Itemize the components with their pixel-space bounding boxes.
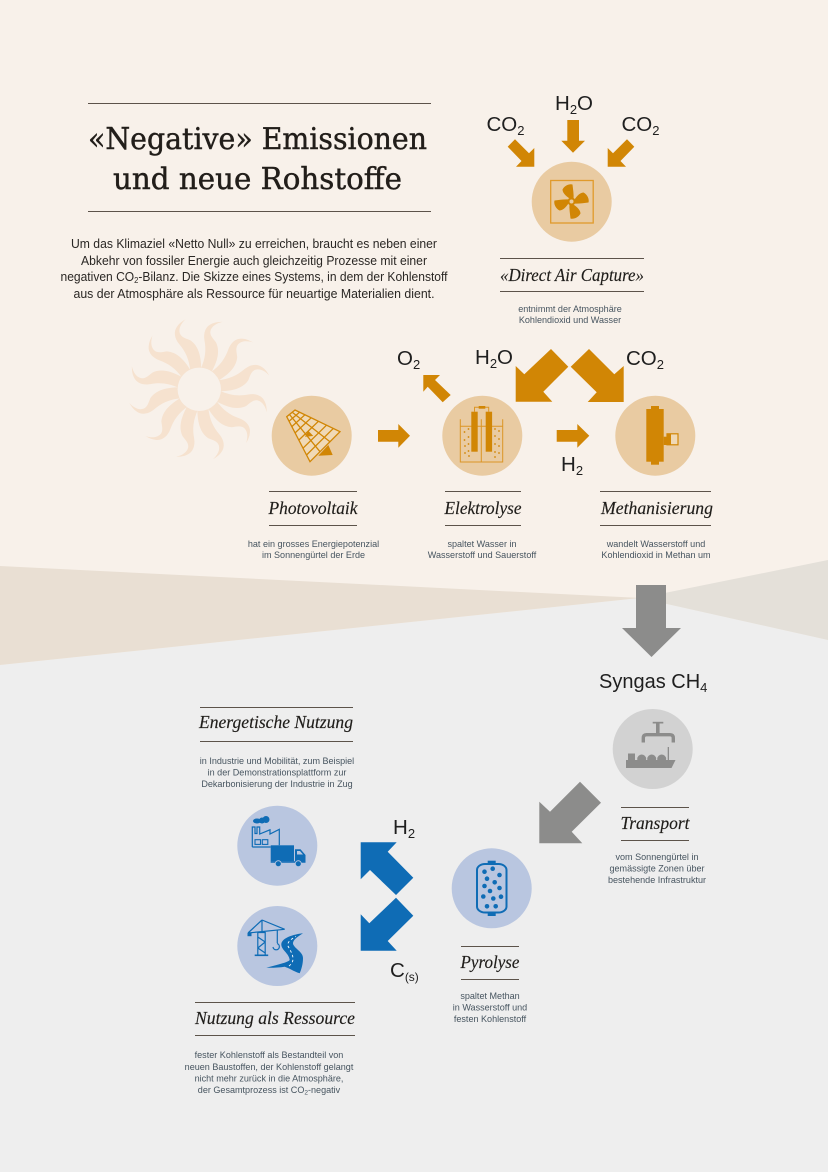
caption: Elektrolyse: Wasserstoff und Sauerstoff — [428, 550, 537, 560]
label: Syngas CH4: 4 — [700, 680, 707, 695]
heading: Photovoltaik: Photovoltaik — [268, 498, 358, 518]
arrow: grey big down — [622, 585, 681, 657]
labels: H2 and solid carbon: (s) — [405, 970, 419, 984]
intro text: aus der Atmosphäre als Ressource für neuartige Materialien dient. — [74, 287, 434, 301]
intro text: Um das Klimaziel «Netto Null» zu erreichen, braucht es neben einer — [71, 237, 437, 251]
caption: Energetische Nutzung — [200, 756, 354, 789]
labels: direct air capture inputs — [486, 92, 659, 138]
caption: Elektrolyse — [428, 539, 537, 560]
heading: Elektrolyse — [444, 492, 522, 526]
arrow: grey diagonal to pyrolyse — [539, 782, 601, 843]
caption: Pyrolyse: spaltet Methan — [460, 991, 520, 1001]
caption: Transport: gemässigte Zonen über — [609, 864, 705, 874]
labels: electrolysis outputs and inputs: O — [497, 346, 513, 369]
icon: direct air capture fan — [532, 162, 612, 242]
icon: pyrolyse — [452, 848, 532, 928]
caption: Transport: vom Sonnengürtel in — [616, 852, 698, 862]
labels: H2 and solid carbon: C — [390, 959, 405, 982]
caption: Energetische Nutzung: in Industrie und Mobilität, zum Beispiel — [200, 756, 354, 766]
icon: sun — [126, 316, 272, 462]
title block — [88, 104, 431, 212]
labels: H2 and solid carbon: H — [393, 816, 408, 839]
title block: «Negative» Emissionen — [88, 122, 427, 157]
intro text: negativen CO — [60, 270, 138, 284]
heading: Nutzung als Ressource: Nutzung als Ressource — [194, 1008, 355, 1028]
caption: Photovoltaik: im Sonnengürtel der Erde — [262, 550, 365, 560]
caption: Pyrolyse: in Wasserstoff und — [453, 1002, 527, 1012]
caption: Nutzung als Ressource: fester Kohlenstoff als Bestandteil von — [195, 1050, 343, 1060]
caption: Pyrolyse — [453, 991, 527, 1024]
heading: Methanisierung — [600, 492, 713, 526]
caption: Nutzung als Ressource — [185, 1050, 354, 1096]
heading: Methanisierung: Methanisierung — [600, 498, 713, 518]
caption: Nutzung als Ressource: 2 — [304, 1090, 308, 1096]
labels: electrolysis outputs and inputs: 2 — [413, 357, 420, 372]
caption: Transport: bestehende Infrastruktur — [608, 875, 706, 885]
background: grey lower area — [0, 598, 828, 1172]
arrow: CO2 big — [571, 349, 624, 402]
arrow: H2O down to fan — [561, 120, 585, 153]
arrow: CO2 right to fan — [608, 139, 634, 167]
labels: direct air capture inputs: O — [577, 92, 593, 115]
caption: Nutzung als Ressource: nicht mehr zurück in die Atmosphäre, — [195, 1074, 343, 1084]
heading: Pyrolyse — [460, 946, 520, 980]
labels: direct air capture inputs: 2 — [517, 123, 524, 138]
title block: und neue Rohstoffe — [113, 162, 402, 197]
icon: methanisierung — [615, 396, 695, 476]
caption: Direct Air Capture: entnimmt der Atmosphäre — [518, 304, 622, 314]
caption: Nutzung als Ressource: neuen Baustoffen, der Kohlenstoff gelangt — [185, 1062, 354, 1072]
labels: electrolysis outputs and inputs — [397, 346, 664, 478]
caption: Photovoltaik — [248, 539, 379, 560]
caption: Direct Air Capture: Kohlendioxid und Wasser — [519, 315, 621, 325]
heading: Photovoltaik — [268, 492, 358, 526]
caption: Pyrolyse: festen Kohlenstoff — [454, 1014, 527, 1024]
icon: elektrolyse — [442, 396, 522, 476]
caption: Methanisierung: wandelt Wasserstoff und — [606, 539, 705, 549]
label: Syngas CH4: Syngas CH — [599, 671, 700, 693]
intro text: 2 — [134, 276, 139, 285]
background: right grey band — [640, 560, 828, 640]
labels: direct air capture inputs: CO — [622, 113, 652, 136]
labels: electrolysis outputs and inputs: H — [475, 346, 490, 369]
labels: direct air capture inputs: H — [555, 92, 570, 115]
icon: transport — [613, 709, 693, 789]
heading: Transport — [620, 808, 690, 840]
heading: Elektrolyse: Elektrolyse — [444, 498, 522, 518]
arrow: CO2 left to fan — [508, 139, 534, 167]
icon: factory and truck — [237, 806, 317, 886]
arrow: O2 out — [423, 375, 451, 402]
caption: Transport — [608, 852, 706, 885]
caption: Energetische Nutzung: Dekarbonisierung der Industrie in Zug — [201, 779, 353, 789]
arrow: H2 to methanisierung — [557, 424, 589, 448]
labels: electrolysis outputs and inputs: CO — [626, 347, 657, 370]
caption: Nutzung als Ressource: -negativ — [308, 1085, 341, 1095]
caption: Methanisierung — [601, 539, 711, 560]
labels: electrolysis outputs and inputs: O — [397, 347, 413, 370]
background: left beige band — [0, 566, 640, 665]
intro text — [60, 237, 448, 301]
icon: photovoltaik — [272, 396, 352, 476]
labels: electrolysis outputs and inputs: 2 — [490, 356, 497, 371]
caption: Nutzung als Ressource: der Gesamtprozess ist CO — [198, 1085, 304, 1095]
intro text: -Bilanz. Die Skizze eines Systems, in dem der Kohlenstoff — [138, 270, 448, 284]
heading: Transport: Transport — [620, 813, 690, 833]
labels: direct air capture inputs: 2 — [570, 102, 577, 117]
arrow: blue up-left H2 — [361, 842, 413, 895]
labels: electrolysis outputs and inputs: 2 — [576, 463, 583, 478]
intro text: Abkehr von fossiler Energie auch gleichzeitig Prozesse mit einer — [81, 254, 427, 268]
arrow: photovoltaik to elektrolyse — [378, 424, 410, 448]
caption: Direct Air Capture — [518, 304, 622, 325]
icon: crane and road — [237, 906, 317, 986]
labels: electrolysis outputs and inputs: H — [561, 453, 576, 476]
labels: H2 and solid carbon — [390, 816, 419, 984]
caption: Methanisierung: Kohlendioxid in Methan um — [601, 550, 711, 560]
labels: electrolysis outputs and inputs: 2 — [657, 357, 664, 372]
caption: Elektrolyse: spaltet Wasser in — [447, 539, 517, 549]
caption: Energetische Nutzung: in der Demonstrationsplattform zur — [208, 768, 346, 778]
arrow: blue down-left carbon — [361, 898, 413, 951]
labels: direct air capture inputs: CO — [486, 113, 517, 136]
caption: Photovoltaik: hat ein grosses Energiepotenzial — [248, 539, 379, 549]
labels: direct air capture inputs: 2 — [652, 123, 659, 138]
heading: Energetische Nutzung: Energetische Nutzung — [198, 712, 353, 732]
heading: Pyrolyse: Pyrolyse — [460, 952, 520, 972]
arrow: H2O big — [516, 349, 568, 402]
labels: H2 and solid carbon: 2 — [408, 826, 415, 841]
heading: Direct Air Capture: «Direct Air Capture» — [500, 265, 644, 285]
